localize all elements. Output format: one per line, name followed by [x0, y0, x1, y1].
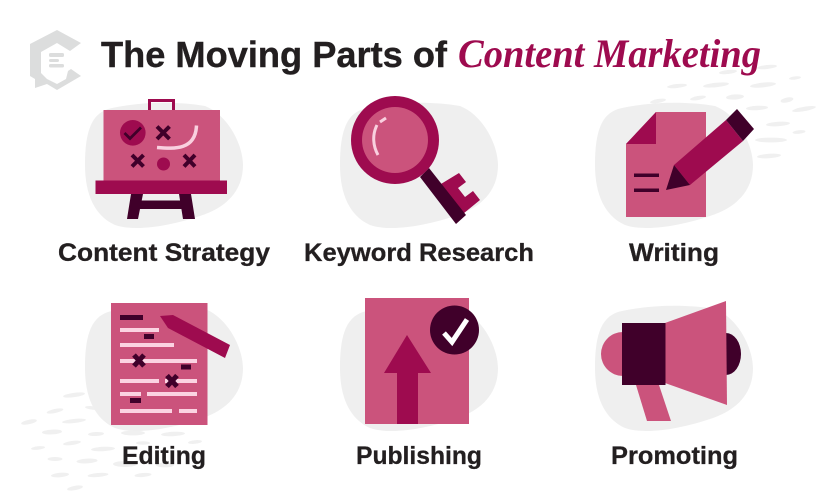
label: Content Strategy	[58, 239, 270, 267]
label: Writing	[629, 239, 719, 267]
label: Keyword Research	[304, 239, 534, 267]
label: Editing	[122, 442, 206, 470]
panel: keyword research	[304, 96, 534, 267]
icon: presentation easel	[96, 100, 227, 219]
icon: megaphone	[601, 301, 741, 421]
label: Publishing	[356, 442, 482, 470]
title	[101, 31, 761, 76]
title: Content Marketing	[458, 31, 761, 76]
panel: content strategy	[58, 100, 270, 267]
panel: editing	[85, 303, 243, 470]
icon: magnifying glass key	[351, 96, 480, 224]
icon: edited document	[111, 303, 230, 425]
panel: promoting	[595, 301, 753, 470]
logo	[30, 30, 81, 90]
label: Promoting	[611, 442, 738, 470]
icon: upload document	[365, 298, 479, 424]
title: The Moving Parts of	[101, 34, 448, 75]
panel: writing	[595, 103, 754, 267]
icon: document and pencil	[626, 109, 754, 217]
panel: publishing	[340, 298, 498, 470]
